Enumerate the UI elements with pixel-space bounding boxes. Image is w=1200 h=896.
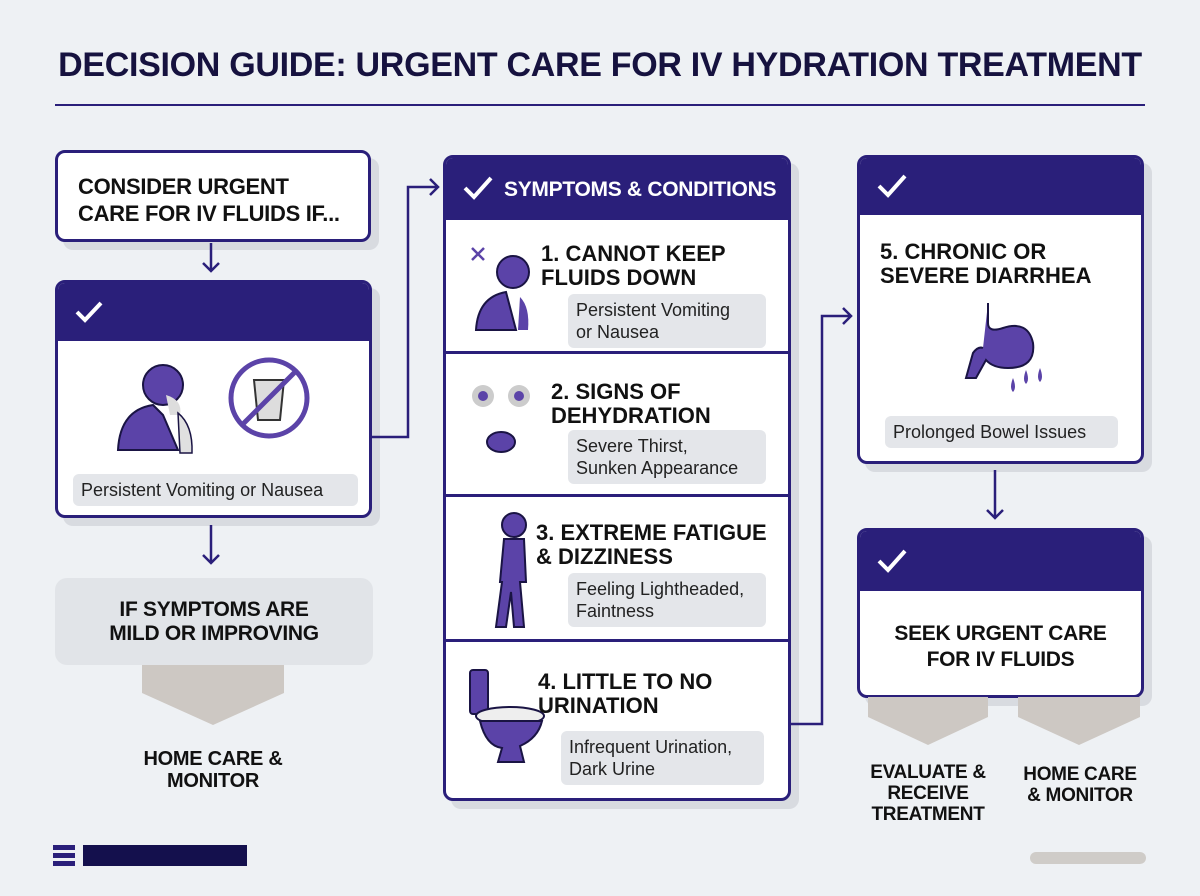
- row 1: Persistent Vomiting: [576, 300, 730, 320]
- panel: seek urgent care: SEEK URGENT CARE: [894, 622, 1107, 645]
- row 3: 3. EXTREME FATIGUE: [536, 520, 767, 545]
- box: mild or improving: MILD OR IMPROVING: [109, 622, 319, 645]
- row 4: 4. LITTLE TO NO: [538, 669, 712, 694]
- text: home care right: & MONITOR: [1027, 785, 1133, 806]
- arrow down 2: [202, 525, 220, 565]
- row 3: Feeling Lightheaded,: [576, 579, 744, 599]
- icon: stomach: [964, 303, 1042, 392]
- text: home care left: [144, 748, 282, 792]
- panel: symptoms & conditions: SYMPTOMS & CONDITIONS: [504, 178, 776, 201]
- panel: diarrhea: Prolonged Bowel Issues: [893, 422, 1086, 442]
- icon: no water glass: [228, 358, 310, 438]
- panel: diarrhea: 5. CHRONIC OR: [880, 239, 1046, 264]
- panel: seek urgent care: [857, 528, 1144, 698]
- arrow: connector to right: [791, 307, 853, 726]
- panel: diarrhea: SEVERE DIARRHEA: [880, 263, 1091, 288]
- text: home care right: HOME CARE: [1023, 764, 1137, 785]
- box: consider urgent care: CARE FOR IV FLUIDS IF...: [78, 201, 340, 226]
- icon: vomiting person: [116, 364, 193, 454]
- arrow down right: [986, 470, 1004, 520]
- row 4: [469, 669, 764, 785]
- text: home care left: MONITOR: [167, 770, 259, 792]
- row 3: Faintness: [576, 601, 654, 621]
- text: home care left: HOME CARE &: [144, 748, 282, 770]
- footer icons: [53, 845, 75, 867]
- row 3: [446, 497, 788, 642]
- box: mild or improving: IF SYMPTOMS ARE: [119, 598, 309, 621]
- row 1: [446, 220, 788, 354]
- panel: diarrhea: [857, 155, 1144, 464]
- text: evaluate: TREATMENT: [871, 804, 985, 825]
- row 2: [446, 354, 788, 497]
- box: consider urgent care: CONSIDER URGENT: [78, 174, 289, 199]
- title: DECISION GUIDE: URGENT CARE FOR IV HYDRATION TREATMENT: [58, 46, 1142, 84]
- row 1: FLUIDS DOWN: [541, 265, 696, 290]
- box: consider urgent care: [55, 150, 371, 242]
- arrow: connector to middle: [372, 178, 440, 438]
- row 1: 1. CANNOT KEEP: [541, 241, 726, 266]
- panel: vomiting card: [55, 280, 372, 518]
- arrow down 1: [202, 243, 220, 273]
- row 2: Severe Thirst,: [576, 436, 688, 456]
- pointer left: [142, 665, 284, 725]
- text: evaluate: EVALUATE &: [870, 762, 986, 783]
- row 4: URINATION: [538, 693, 659, 718]
- text: home care right: [1023, 764, 1137, 806]
- panel: seek urgent care: FOR IV FLUIDS: [927, 648, 1074, 671]
- text: evaluate: [870, 762, 986, 825]
- panel: vomiting card: Persistent Vomiting or Nausea: [81, 480, 323, 500]
- row 4: Dark Urine: [569, 759, 655, 779]
- row 1: or Nausea: [576, 322, 659, 342]
- row 2: Sunken Appearance: [576, 458, 738, 478]
- panel: symptoms & conditions: [443, 155, 791, 801]
- text: evaluate: RECEIVE: [887, 783, 969, 804]
- row 3: & DIZZINESS: [536, 544, 673, 569]
- box: mild or improving: [55, 578, 373, 665]
- row 4: Infrequent Urination,: [569, 737, 732, 757]
- pointers right: [868, 697, 1140, 745]
- row 2: DEHYDRATION: [551, 403, 711, 428]
- row 2: 2. SIGNS OF: [551, 379, 681, 404]
